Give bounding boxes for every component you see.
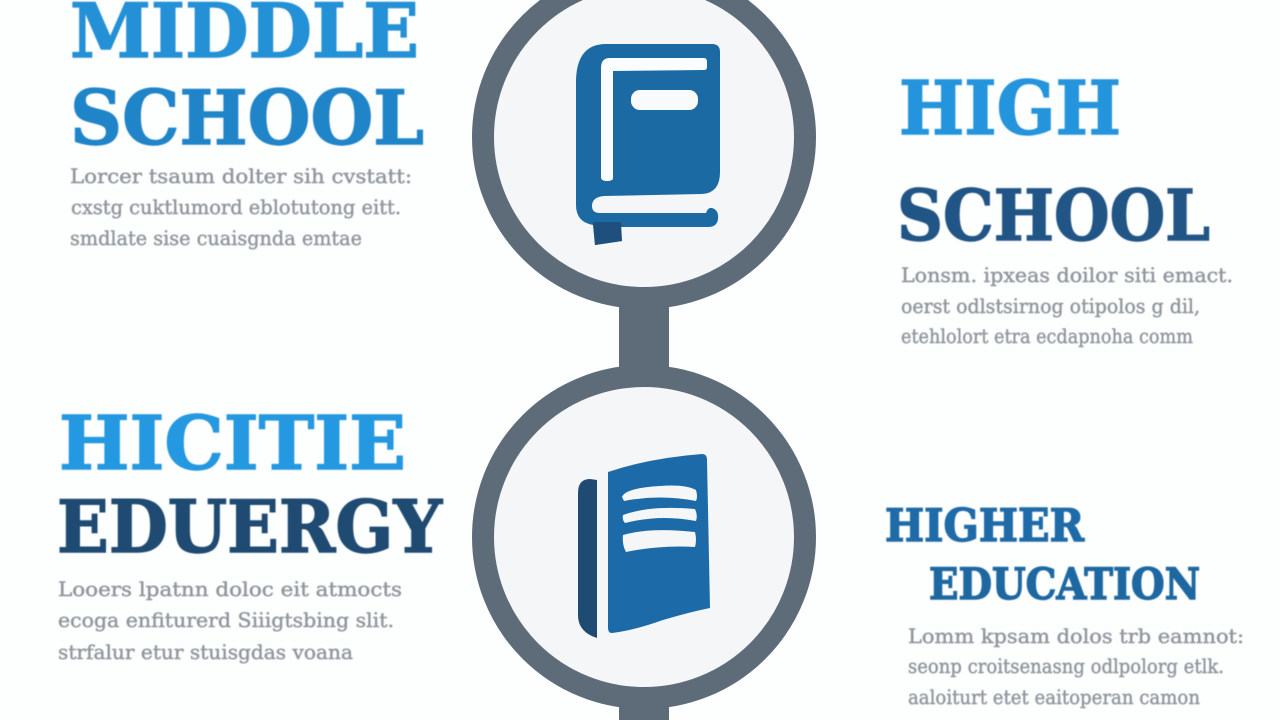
icon: closed book: [576, 44, 720, 245]
text block: middle school: smdlate sise cuaisgnda emtae: [70, 226, 362, 250]
bottom connector stub: [619, 700, 669, 720]
text block: high school: etehlolort etra ecdapnoha comm: [901, 324, 1193, 348]
heading: higher education: HIGHER: [885, 499, 1085, 552]
text block: higher education: aaloiturt etet eaitoperan camon: [908, 685, 1200, 709]
circle: bottom book: [483, 376, 805, 698]
text block: higher education: Lomm kpsam dolos trb eamnot:: [908, 624, 1244, 648]
text block: lower left: ecoga enfiturerd Siiigtsbing slit.: [58, 608, 394, 632]
text block: middle school: Lorcer tsaum dolter sih cvstatt:: [70, 164, 412, 188]
connector between circles: [619, 295, 669, 380]
heading: higher education: EDUCATION: [929, 560, 1200, 610]
text block: lower left: strfalur etur stuisgdas voana: [58, 640, 353, 664]
text block: lower left: [58, 577, 402, 664]
text block: high school: oerst odlstsirnog otipolos g dil,: [901, 294, 1200, 318]
text block: high school: [901, 263, 1233, 348]
heading: high school: [897, 66, 1210, 257]
icon: open book: [578, 454, 710, 638]
heading: high school: HIGH: [899, 66, 1121, 152]
heading: middle school: [70, 0, 424, 162]
circle: top book: [483, 0, 805, 298]
heading: middle school: SCHOOL: [70, 74, 424, 162]
heading: lower left: HICITIE: [59, 401, 406, 487]
text block: lower left: Looers lpatnn doloc eit atmocts: [58, 577, 402, 601]
heading: high school: SCHOOL: [897, 174, 1210, 257]
text block: middle school: cxstg cuktlumord eblotutong eitt.: [71, 195, 401, 219]
text block: high school: Lonsm. ipxeas doilor siti emact.: [901, 263, 1233, 287]
heading: higher education: [885, 499, 1200, 610]
text block: higher education: seonp croitsenasng odlpolorg etlk.: [908, 654, 1224, 678]
heading: lower left: [57, 401, 444, 569]
text block: higher education: [908, 624, 1244, 709]
heading: lower left: EDUERGY: [57, 484, 444, 569]
text block: middle school: [70, 164, 412, 250]
